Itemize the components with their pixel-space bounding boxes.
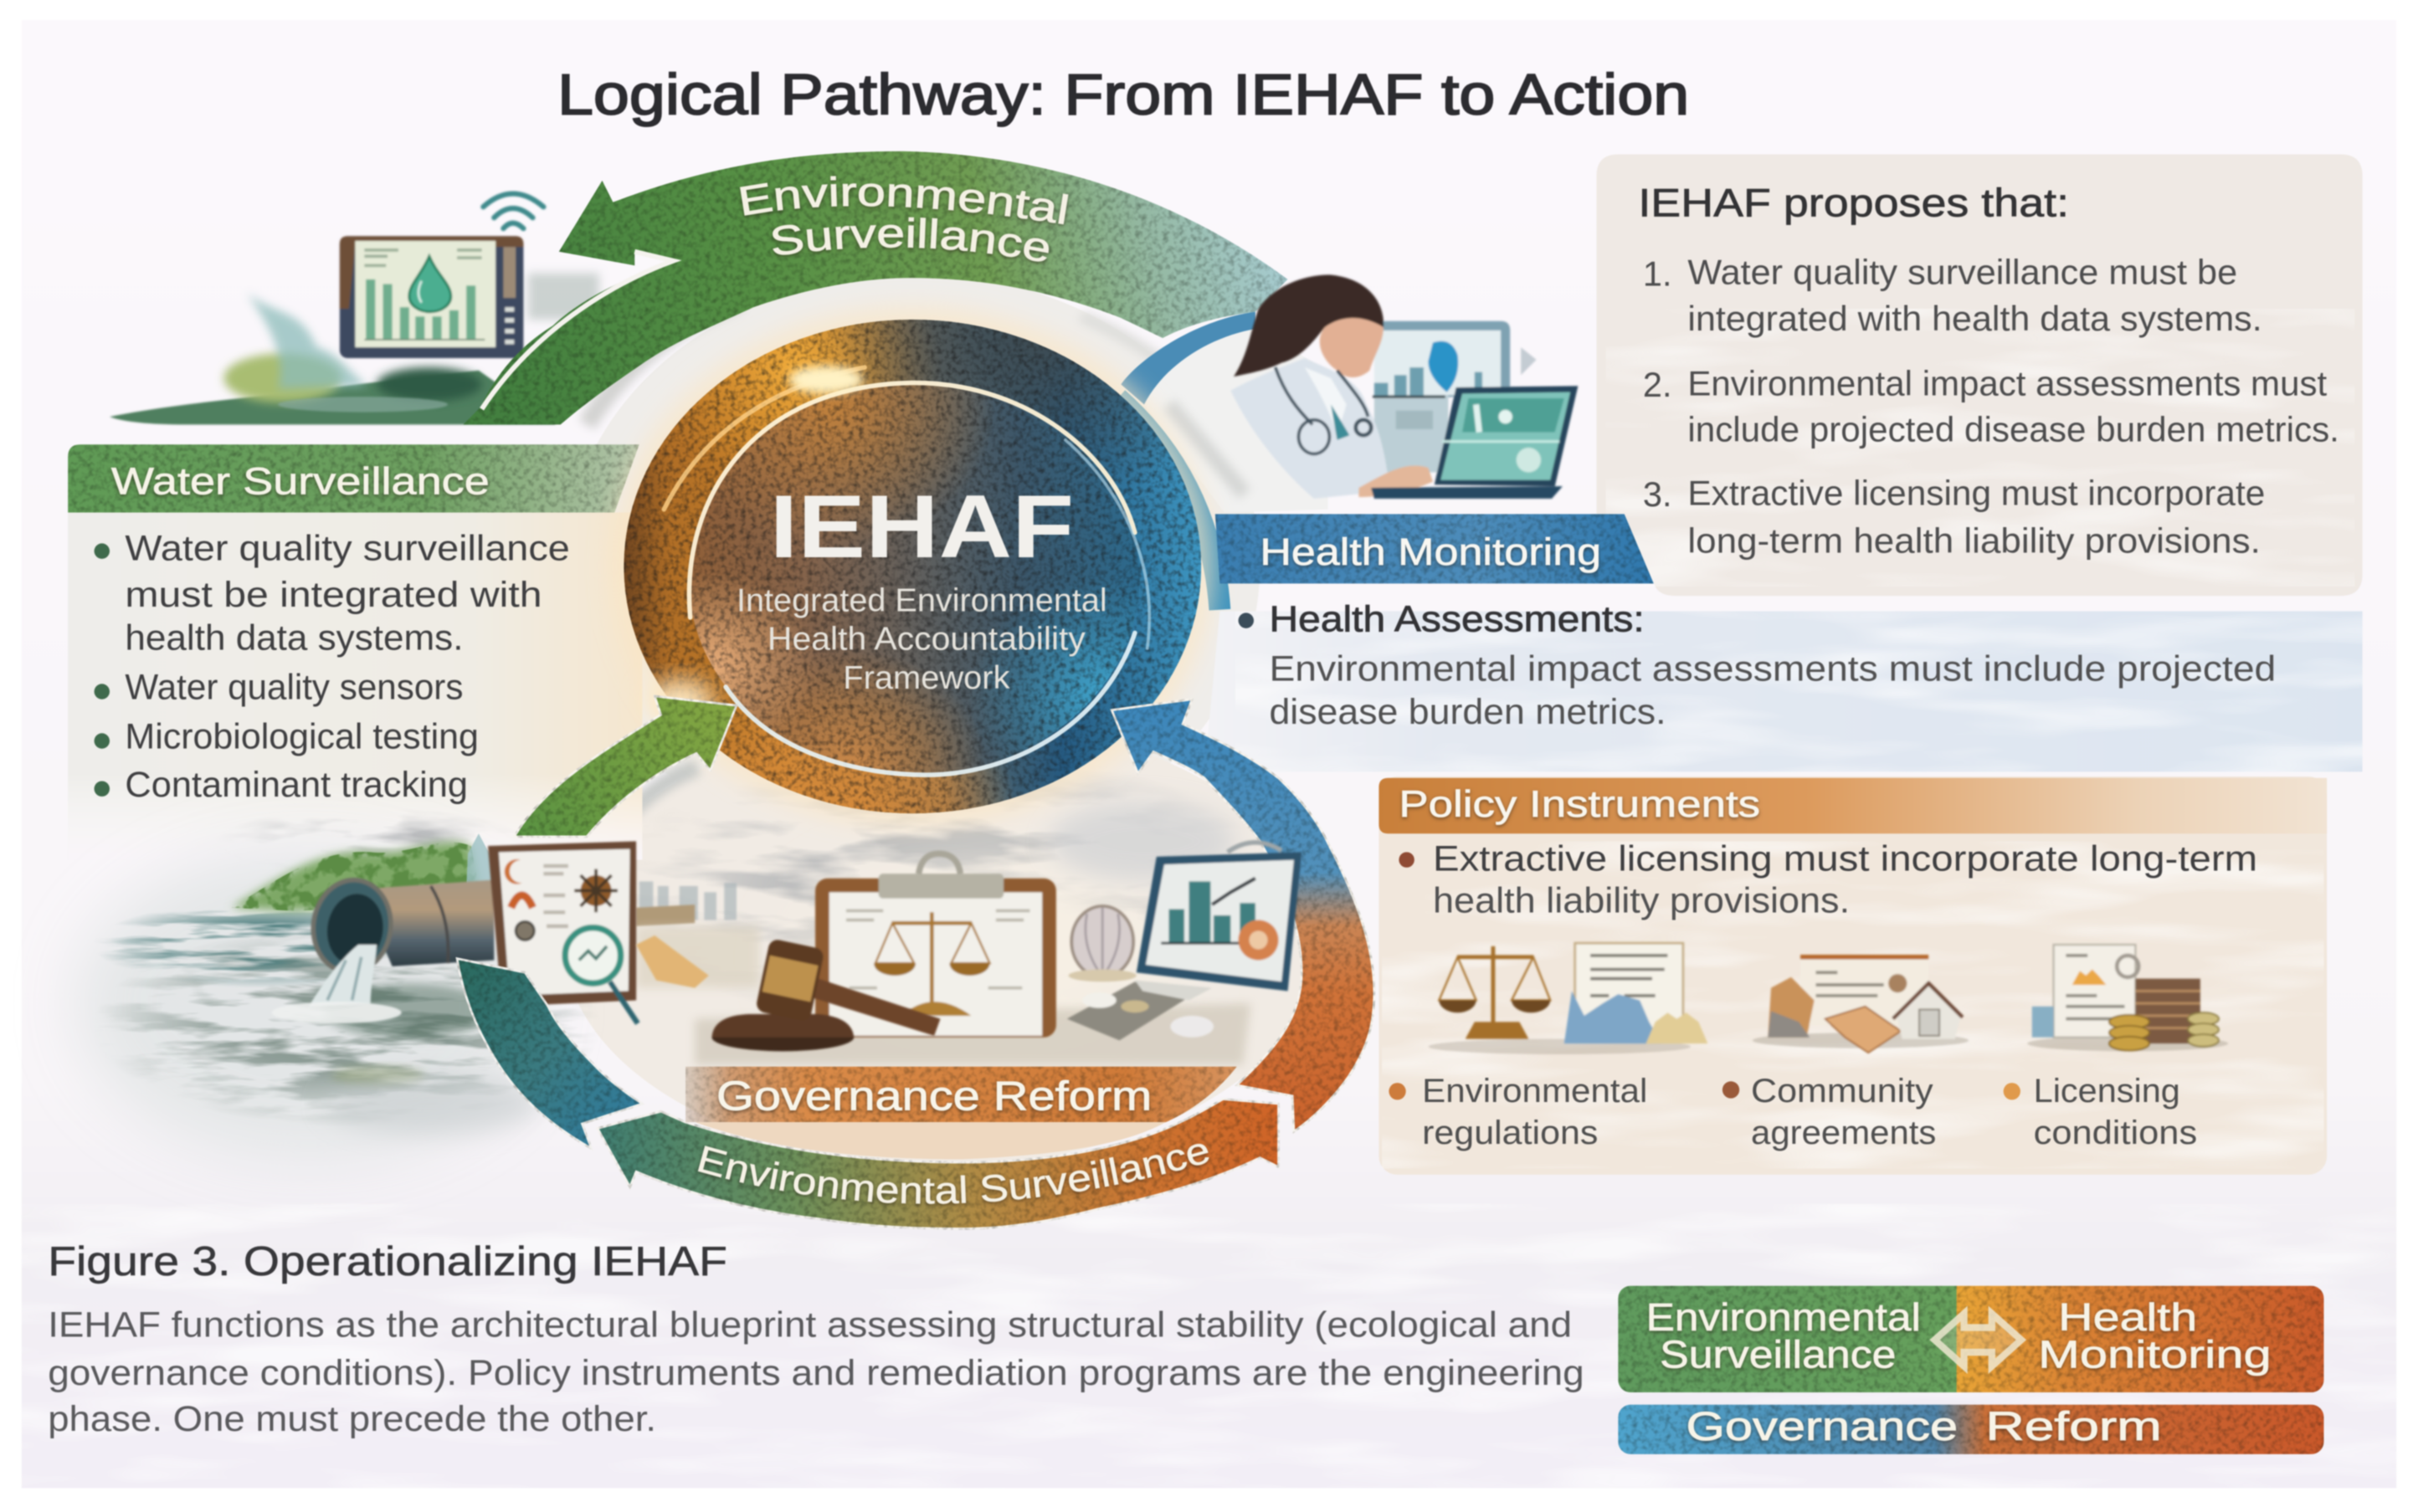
panel heading: IEHAF proposes that:: [1638, 180, 2069, 224]
banner: health monitoring: [1215, 514, 1654, 583]
arrow: bottom environmental surveillance: [598, 1098, 1281, 1230]
legend: [1618, 1286, 2323, 1454]
panel: policy instruments: Extractive licensing must incorporate long-term: [1433, 838, 2257, 878]
scene: water surveillance sensor: [110, 194, 599, 424]
arrow notch highlight: [482, 252, 673, 409]
panel: water surveillance: health data systems.: [125, 618, 463, 658]
panel: health assessments: disease burden metrics.: [1269, 692, 1666, 731]
doctor illustration: [1230, 274, 1578, 499]
rolled papers: [636, 935, 709, 988]
banner: governance reform: [685, 1067, 1237, 1159]
panel: water surveillance: must be integrated with: [125, 575, 542, 614]
tablet with chart: [1137, 843, 1301, 991]
instrument labels: agreements: [1751, 1115, 1936, 1151]
clipboard icons: [505, 859, 522, 884]
icon: scales and regulation document: [1428, 943, 1707, 1054]
core subtitle: Health Accountability: [767, 622, 1086, 658]
instrument labels: Licensing: [2034, 1073, 2180, 1110]
arrow: green rising to core: [514, 696, 737, 837]
legend: Health: [2058, 1295, 2197, 1339]
paper wedge: [1144, 329, 1328, 512]
core subtitle: Integrated Environmental: [737, 583, 1107, 619]
drain pipe: [272, 875, 494, 1023]
tablet device: [340, 236, 523, 358]
monitoring clipboard: [488, 841, 638, 1023]
instrument labels: regulations: [1422, 1115, 1598, 1151]
numbered list: 1.: [1643, 254, 1672, 293]
figure caption text: governance conditions). Policy instruments and remediation programs are the engineering: [48, 1353, 1584, 1392]
central IEHAF core: [612, 307, 1214, 826]
core subtitle: Framework: [843, 660, 1010, 696]
panel: water surveillance: Microbiological testing: [125, 717, 479, 756]
panel: water surveillance: Water quality surveillance: [125, 529, 570, 568]
panel: policy instruments: Policy Instruments: [1399, 784, 1760, 825]
icon: wifi: [483, 194, 543, 228]
tray of samples: [1067, 980, 1214, 1040]
haze and smoke: [77, 849, 541, 1158]
clipboard with scales: [815, 853, 1056, 1038]
numbered list: 3.: [1643, 474, 1672, 514]
coat: [1230, 358, 1389, 499]
face: [1320, 318, 1384, 377]
background monitor: [1373, 321, 1537, 473]
panel: water surveillance: Water quality sensors: [125, 668, 463, 707]
laptop: [1371, 386, 1578, 499]
hand: [1358, 466, 1433, 497]
arrow: blue and orange right side: [1111, 700, 1374, 1131]
arc label: [738, 175, 1070, 265]
panel header: [1378, 778, 2327, 833]
figure caption text: phase. One must precede the other.: [48, 1399, 656, 1438]
bullet text: [1399, 852, 1414, 868]
legend: Surveillance: [1660, 1333, 1896, 1376]
shoreline trees: [232, 843, 482, 910]
bullet list: [95, 543, 110, 797]
legend: Environmental: [1646, 1295, 1921, 1339]
arrow: top environmental surveillance: [463, 151, 1288, 425]
numbered list: include projected disease burden metrics.: [1687, 410, 2339, 449]
stethoscope: [1276, 367, 1368, 424]
icon: handshake and house: [1753, 957, 1969, 1053]
figure caption heading: Figure 3. Operationalizing IEHAF: [48, 1239, 727, 1284]
lower cloudy inner circle: [563, 718, 1320, 1166]
numbered list: [1643, 252, 2339, 560]
legend: Governance: [1686, 1405, 1958, 1449]
numbered list: long-term health liability provisions.: [1687, 520, 2261, 560]
arc label: Environmental: [738, 175, 1070, 228]
numbered list: 2.: [1643, 365, 1672, 404]
core title: IEHAF: [770, 476, 1074, 577]
panel: policy instruments: [1378, 777, 2327, 1175]
arc band, tail and head: [463, 151, 1288, 424]
governance illustration: [695, 843, 1301, 1065]
core subtitle: [737, 583, 1107, 696]
outflow: [309, 945, 377, 1007]
banner: health monitoring: Health Monitoring: [1260, 530, 1601, 573]
instrument labels: conditions: [2034, 1115, 2197, 1151]
buildings on the horizon: [639, 881, 737, 920]
ponytail and hair: [1234, 274, 1384, 377]
core glow rings: [664, 367, 1149, 775]
panel: health assessments: Health Assessments:: [1269, 600, 1645, 640]
globe dome: [1069, 906, 1137, 982]
orb side ring: [1118, 398, 1219, 610]
icon: scales: [875, 912, 990, 1011]
numbered list: Environmental impact assessments must: [1687, 363, 2328, 402]
icon: water drop: [409, 256, 451, 312]
numbered list: Water quality surveillance must be: [1687, 252, 2237, 291]
figure caption text: [48, 1305, 1584, 1438]
arrow: bottom environmental surveillance: Environmental Surveillance: [697, 1143, 1210, 1208]
panel header: [68, 444, 639, 512]
icon: double arrow: [1935, 1314, 2021, 1366]
virus icon: [581, 875, 612, 906]
arc label: Surveillance: [771, 216, 1051, 265]
numbered list: Extractive licensing must incorporate: [1687, 473, 2265, 512]
banner: governance reform: Governance Reform: [716, 1074, 1152, 1119]
instrument labels: Community: [1751, 1073, 1933, 1110]
icon: licence and coins: [2027, 945, 2228, 1051]
legend: governance reform box: [1618, 1405, 2323, 1454]
panel: water surveillance: Water Surveillance: [111, 459, 490, 502]
doctor backdrop and blue arc: [1118, 312, 1328, 610]
riverbank and grass: [110, 274, 599, 424]
panel: water surveillance: [68, 444, 642, 860]
instrument labels: Environmental: [1422, 1073, 1647, 1110]
instrument labels: [1389, 1073, 2197, 1151]
core sphere: [618, 316, 1212, 818]
doctor figure: [1230, 274, 1433, 499]
halo ring around the core: [565, 274, 1260, 860]
panel: health assessments: Environmental impact assessments must include projected: [1269, 649, 2276, 689]
icon: gavel: [711, 938, 941, 1051]
panel body: [68, 512, 642, 860]
lower scene: pipe and water: [77, 807, 760, 1158]
numbered list: integrated with health data systems.: [1687, 299, 2262, 338]
polluted water: [93, 901, 602, 1135]
gauge magnifier: [565, 928, 621, 983]
table surface: [695, 1003, 1250, 1065]
panel: water surveillance: Contaminant tracking: [125, 765, 468, 804]
figure caption text: IEHAF functions as the architectural blueprint assessing structural stability (ecological and: [48, 1305, 1572, 1345]
legend: Monitoring: [2038, 1333, 2272, 1376]
blue arc: [1121, 312, 1255, 404]
panel: policy instruments: health liability provisions.: [1433, 880, 1850, 920]
legend: Reform: [1985, 1405, 2162, 1449]
arrow: teal left lower: [457, 959, 642, 1149]
title: Logical Pathway: From IEHAF to Action: [557, 64, 1689, 127]
panel: IEHAF proposes: [1597, 154, 2363, 596]
legend: surveillance and monitoring box: [1618, 1286, 2323, 1392]
panel: health assessments: [1204, 600, 2363, 771]
bar chart on screen: [366, 279, 475, 340]
water splash: [247, 294, 367, 389]
